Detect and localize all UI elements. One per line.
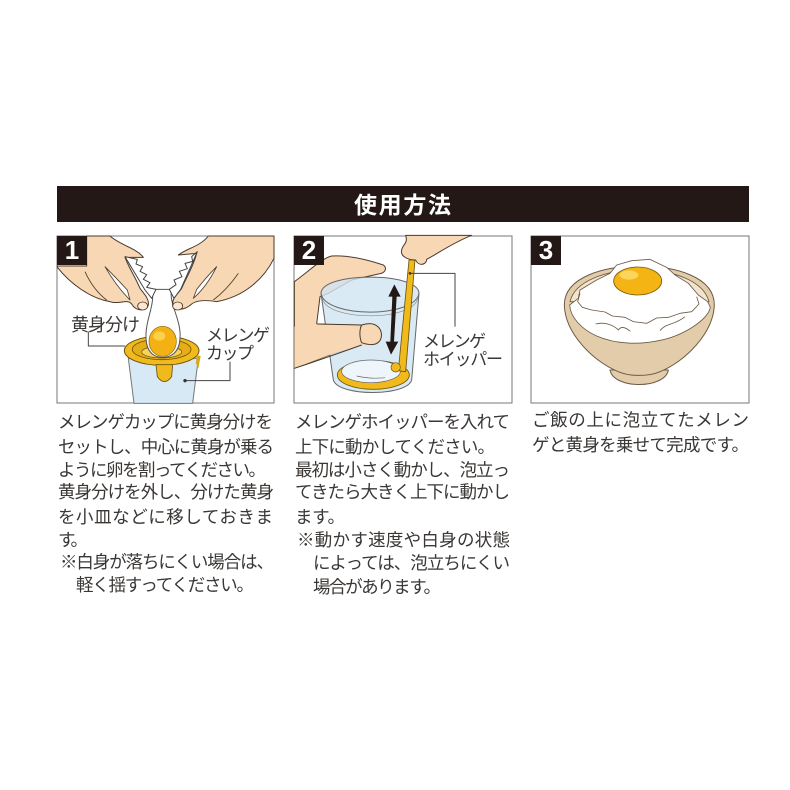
panel: step 2 illustration [294, 235, 512, 403]
icon: thumb over cup [294, 324, 381, 368]
text block: step 2: メレンゲホイッパーを入れて [295, 412, 510, 432]
text block: step 1: セットし、中心に黄身が乗る [58, 437, 274, 457]
number badge 1: 1 [65, 235, 79, 265]
icon: bowl [564, 266, 714, 384]
text block: step 2: 上下に動かしてください。 [295, 437, 495, 457]
text block: step 1 [58, 412, 274, 595]
panel: step 1 illustration [57, 235, 274, 403]
label: meringue whipper: ホイッパー [423, 350, 503, 369]
number badge 3 [531, 235, 561, 265]
icon: yolk [614, 267, 662, 295]
number badge 2: 2 [302, 235, 316, 265]
icon: rice [570, 259, 710, 343]
text block: step 3: ゲと黄身を乗せて完成です。 [532, 435, 749, 455]
text block: step 2: によっては、泡立ちにくい [313, 553, 510, 573]
text block: step 1: 軽く揺すってください。 [76, 575, 254, 595]
label: yolk separator: 黄身分け [71, 315, 140, 335]
text block: step 3: ご飯の上に泡立てたメレン [532, 410, 749, 430]
arrow: up and down [386, 284, 401, 355]
label: meringue cup [206, 326, 270, 363]
text block: step 1: メレンゲカップに黄身分けを [58, 412, 273, 432]
text block: step 1: を小皿などに移しておきま [58, 507, 273, 527]
leader line: cup [183, 362, 230, 382]
text block: step 1: ように卵を割ってください。 [58, 460, 266, 480]
icon: meringue contour lines [578, 293, 699, 331]
icon: left hand [57, 236, 148, 310]
icon: egg shell halves [125, 252, 197, 298]
leader line: yolk separator [88, 332, 125, 346]
label: meringue whipper [423, 332, 503, 369]
icon: finger lines and nails [85, 267, 238, 310]
text block: step 1: ※白身が落ちにくい場合は、 [60, 552, 274, 572]
label: meringue whipper: メレンゲ [423, 332, 486, 351]
label: meringue cup: メレンゲ [206, 326, 270, 345]
text block: step 1: 黄身分けを外し、分けた黄身 [58, 482, 274, 502]
text block: step 2: 場合があります。 [313, 577, 441, 597]
panel: step 3 illustration [531, 235, 749, 403]
icon: glass cup [321, 277, 419, 392]
text block: step 2: てきたら大きく上下に動かし [295, 482, 510, 502]
text block: step 3 [532, 410, 749, 455]
number badge 1 [57, 235, 87, 265]
label: meringue cup: カップ [206, 344, 254, 363]
icon: yolk separator ring [124, 336, 201, 382]
icon: fingers [401, 235, 472, 264]
icon: measuring cup body [128, 358, 198, 403]
icon: holding hand [294, 256, 385, 368]
icon: right hand [173, 236, 274, 309]
title bar: 使用方法 [354, 192, 451, 218]
text block: step 2: ます。 [295, 507, 345, 527]
number badge 2 [294, 235, 324, 265]
text block: step 2: ※動かす速度や白身の状態 [297, 530, 510, 550]
text block: step 2 [295, 412, 510, 597]
title bar [57, 186, 749, 222]
text block: step 1: す。 [58, 530, 88, 550]
number badge 3: 3 [539, 235, 553, 265]
icon: whipper [337, 260, 415, 389]
text block: step 2: 最初は小さく動かし、泡立っ [295, 460, 510, 480]
leader line: whipper [409, 272, 455, 327]
icon: egg white and yolk [146, 289, 180, 357]
